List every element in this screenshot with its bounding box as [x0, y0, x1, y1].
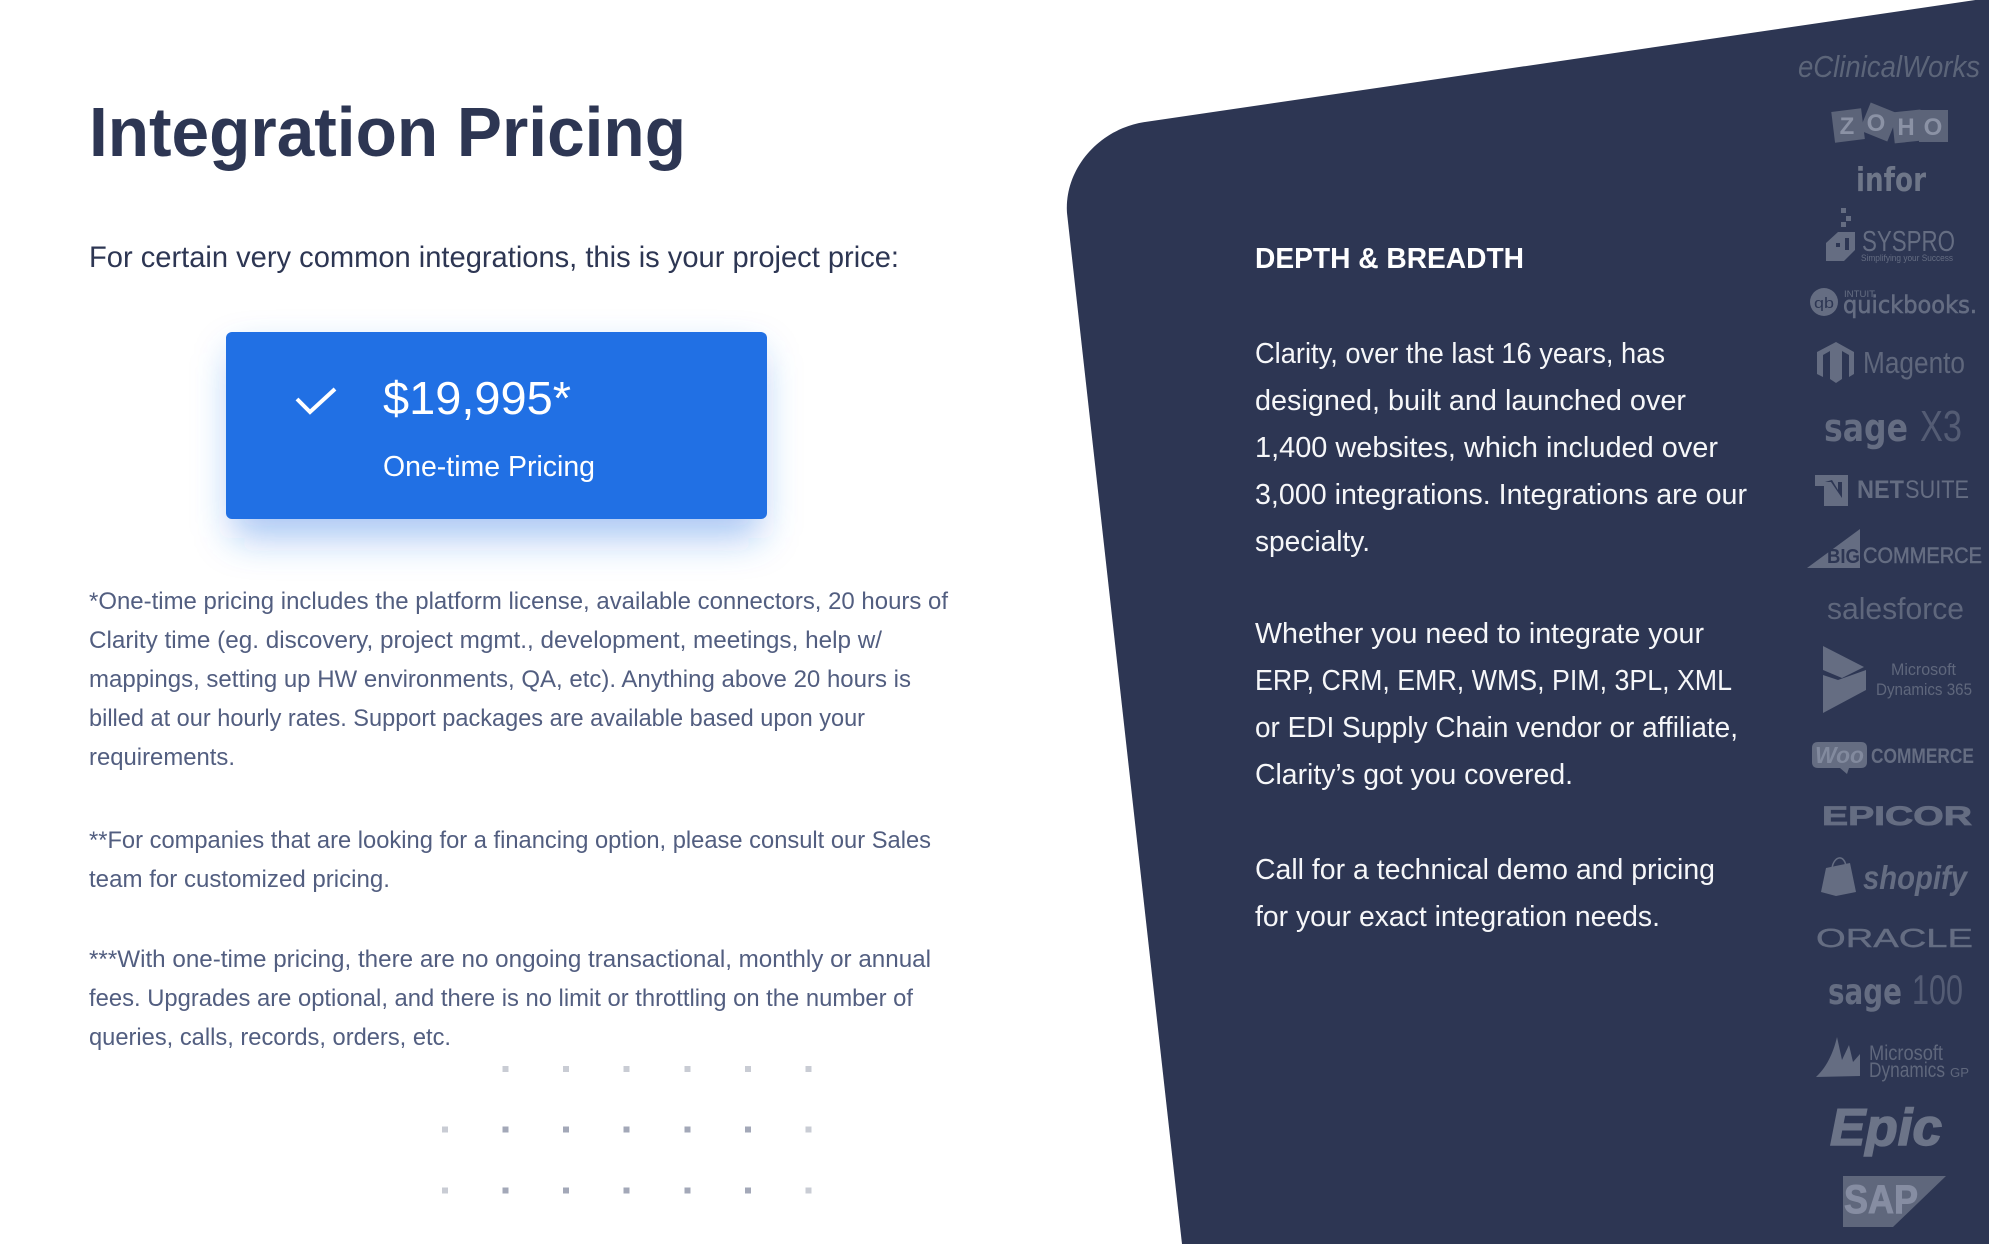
panel heading: DEPTH & BREADTH — [1255, 243, 1524, 275]
footnote: no ongoing fees: queries, calls, records, orders, etc. — [89, 1024, 451, 1051]
logo: Microsoft Dynamics GP: Microsoft — [1869, 1042, 1943, 1065]
logo: Sage 100: sage — [1828, 972, 1902, 1013]
footnote: one-time pricing: billed at our hourly rates. Support packages are available based upon your — [89, 705, 865, 732]
panel text: experience — [1255, 338, 1747, 558]
price: $19,995* — [383, 372, 571, 424]
logo: QuickBooks: quickbooks. — [1843, 291, 1977, 319]
footnote: one-time pricing: mappings, setting up HW environments, QA, etc). Anything above 20 hours is — [89, 666, 911, 693]
logo: NetSuite: NET — [1857, 476, 1904, 504]
logo: QuickBooks: INTUIT — [1844, 289, 1876, 299]
logo: Epic: Epic — [1830, 1099, 1942, 1157]
logo: Zoho: Z — [1840, 113, 1854, 140]
logo: QuickBooks: qb — [1814, 295, 1834, 312]
logo: Shopify: shopify — [1863, 859, 1968, 896]
logo: Sage X3 — [1824, 402, 1962, 451]
logo: Microsoft Dynamics GP: Dynamics — [1869, 1059, 1945, 1082]
logo: Microsoft Dynamics 365: Microsoft — [1891, 660, 1956, 679]
logo: WooCommerce — [1812, 742, 1974, 774]
logo: Microsoft Dynamics GP — [1816, 1037, 1969, 1082]
dot grid — [442, 1066, 812, 1194]
panel text: call to action — [1255, 854, 1715, 933]
footnote: one-time pricing: *One-time pricing includes the platform license, available connectors, 20 hours of — [89, 588, 948, 615]
footnote: no ongoing fees: fees. Upgrades are optional, and there is no limit or throttling on the number of — [89, 985, 913, 1012]
footnote: financing — [89, 827, 931, 893]
logo: Magento: Magento — [1863, 345, 1965, 380]
logo: Microsoft Dynamics 365: Dynamics 365 — [1876, 680, 1972, 699]
logo: BigCommerce: BIG — [1827, 546, 1860, 568]
panel text: call to action: Call for a technical demo and pricing — [1255, 854, 1715, 886]
logo: Sage X3: sage — [1824, 406, 1908, 450]
logo: Syspro — [1826, 208, 1955, 263]
logo: Sage 100: 100 — [1912, 966, 1963, 1013]
logo: Sage X3: X3 — [1920, 402, 1962, 451]
footnote: no ongoing fees: ***With one-time pricing, there are no ongoing transactional, monthly or annual — [89, 946, 931, 973]
panel text: coverage: Clarity’s got you covered. — [1255, 759, 1573, 791]
logo: Microsoft Dynamics GP: GP — [1950, 1065, 1969, 1080]
logo: Microsoft Dynamics 365 — [1823, 646, 1972, 713]
logo: Syspro: Simplifying your Success — [1861, 253, 1953, 263]
footnote: financing: **For companies that are looking for a financing option, please consult our Sales — [89, 827, 931, 854]
logo: Epicor: EPICOR — [1822, 801, 1972, 831]
logo: SAP — [1843, 1176, 1946, 1227]
panel text: coverage: Whether you need to integrate your — [1255, 618, 1704, 650]
panel text: experience: specialty. — [1255, 526, 1370, 558]
logo: Zoho: O — [1924, 114, 1942, 141]
footnote: financing: team for customized pricing. — [89, 866, 390, 893]
price label: One-time Pricing — [383, 451, 595, 483]
logo: Syspro: SYSPRO — [1862, 226, 1955, 258]
footnote: one-time pricing: requirements. — [89, 744, 235, 771]
panel text: coverage: or EDI Supply Chain vendor or affiliate, — [1255, 712, 1738, 744]
logo: Oracle: ORACLE — [1816, 923, 1973, 953]
logo: Zoho: O — [1867, 110, 1885, 137]
panel: dark angled background — [1067, 0, 1989, 1244]
logo: Salesforce: salesforce — [1827, 591, 1964, 626]
logo: SAP: SAP — [1844, 1178, 1918, 1222]
logo: Shopify — [1821, 858, 1968, 896]
logo: Zoho — [1831, 102, 1948, 143]
panel text: call to action: for your exact integration needs. — [1255, 901, 1660, 933]
logo: Sage 100 — [1828, 966, 1963, 1013]
footnote: one-time pricing: Clarity time (eg. discovery, project mgmt., development, meetings, help w/ — [89, 627, 882, 654]
logo: BigCommerce — [1807, 529, 1982, 568]
logo: NetSuite: SUITE — [1905, 476, 1969, 504]
title: Integration Pricing — [89, 93, 686, 171]
pricing card — [226, 332, 767, 538]
subheading: For certain very common integrations, this is your project price: — [89, 241, 899, 274]
icon: check mark — [297, 389, 335, 412]
logo: Magento — [1817, 342, 1965, 383]
footnote: no ongoing fees — [89, 946, 931, 1051]
footnote: one-time pricing — [89, 588, 948, 771]
panel text: coverage — [1255, 618, 1738, 791]
logo: Zoho: H — [1897, 114, 1915, 141]
panel text: experience: designed, built and launched over — [1255, 385, 1686, 417]
panel text: experience: 3,000 integrations. Integrations are our — [1255, 479, 1747, 511]
logo: NetSuite — [1815, 475, 1969, 506]
panel text: experience: Clarity, over the last 16 years, has — [1255, 338, 1665, 370]
logo: QuickBooks — [1810, 288, 1977, 319]
logo: Infor: infor — [1856, 160, 1927, 199]
panel text: coverage: ERP, CRM, EMR, WMS, PIM, 3PL, XML — [1255, 665, 1732, 697]
logo: WooCommerce: Woo — [1815, 742, 1864, 768]
panel text: experience: 1,400 websites, which included over — [1255, 432, 1718, 464]
